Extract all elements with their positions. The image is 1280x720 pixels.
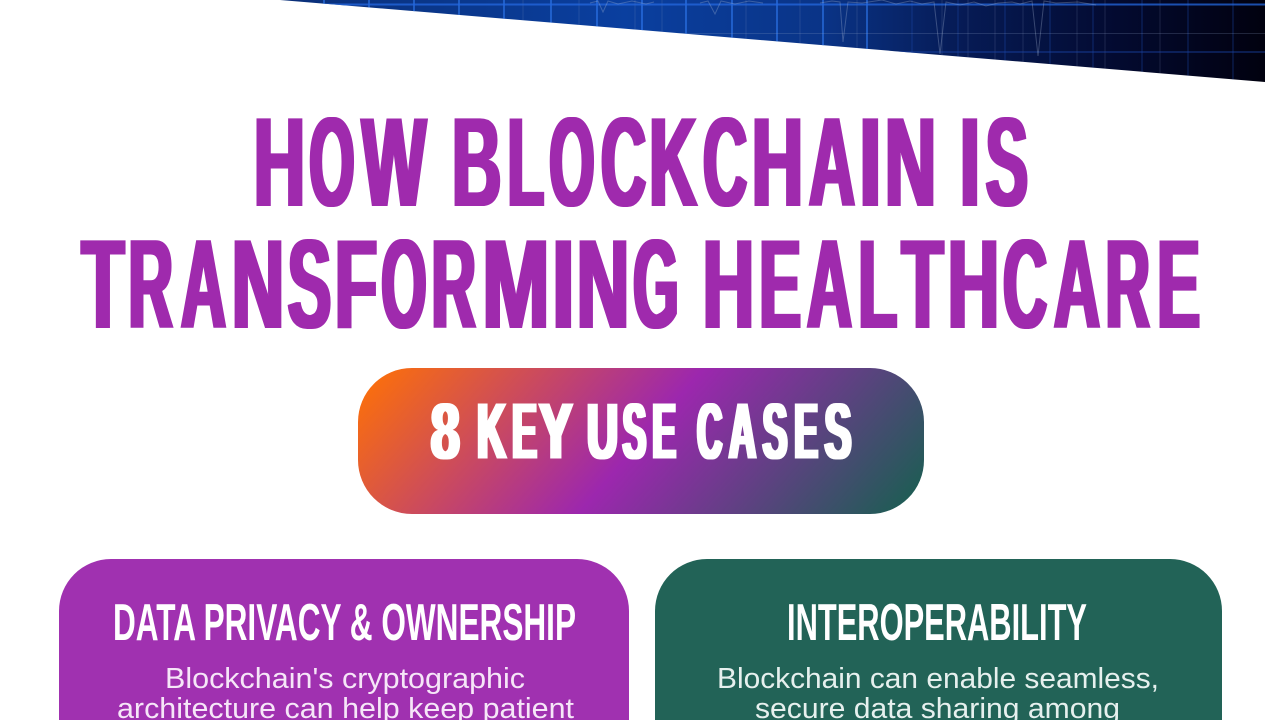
title: R [128,213,173,355]
title: O [549,91,594,233]
card body text: Blockchain can enable seamless, [717,663,1159,695]
badge: 8 key use cases: A [729,386,756,476]
badge: 8 key use cases [358,368,924,514]
badge: 8 key use cases: S [825,386,851,476]
panel: data privacy and ownership [59,559,629,720]
badge: 8 key use cases: E [794,386,818,476]
title: I [552,213,574,355]
title: E [759,213,801,355]
title: R [1106,213,1150,355]
card body text: Blockchain's cryptographic [165,663,525,695]
title: C [703,91,747,233]
title: N [885,91,936,233]
title: O [309,91,354,233]
card heading: INTEROPERABILITY [787,594,1087,652]
panel: interoperability [655,559,1222,720]
title: A [809,91,855,233]
card body text [717,663,1159,720]
title: N [577,213,629,355]
title: K [649,91,697,233]
badge: 8 key use cases: U [587,386,618,476]
title: L [508,91,544,233]
title: H [752,91,803,233]
title: T [902,213,943,355]
title: S [986,91,1028,233]
title: C [601,91,646,233]
title: M [482,213,550,355]
title [82,91,1200,355]
card body text [117,663,574,720]
title: N [232,213,284,355]
badge: 8 key use cases: S [623,386,646,476]
title: L [858,213,897,355]
title: H [948,213,999,355]
title: W [362,91,426,233]
title: O [381,213,426,355]
title: F [335,213,377,355]
title: C [1003,213,1047,355]
card heading: DATA PRIVACY & OWNERSHIP [113,594,576,652]
title: E [1157,213,1200,355]
badge: 8 key use cases: Y [539,386,572,476]
badge: 8 key use cases: 8 [431,386,460,476]
title: H [254,91,305,233]
title: R [432,213,476,355]
badge: 8 key use cases: C [697,386,722,476]
badge: 8 key use cases: K [477,386,506,476]
badge: 8 key use cases: S [763,386,787,476]
title: B [452,91,501,233]
title: A [807,213,852,355]
title: G [633,213,679,355]
title: S [288,213,331,355]
title: T [82,213,124,355]
badge: 8 key use cases: E [512,386,537,476]
banner: ECG grid image [280,0,1265,82]
title: A [181,213,226,355]
title: H [703,213,754,355]
badge: 8 key use cases: E [652,386,676,476]
title: I [859,91,882,233]
title: A [1054,213,1100,355]
title: I [960,91,980,233]
